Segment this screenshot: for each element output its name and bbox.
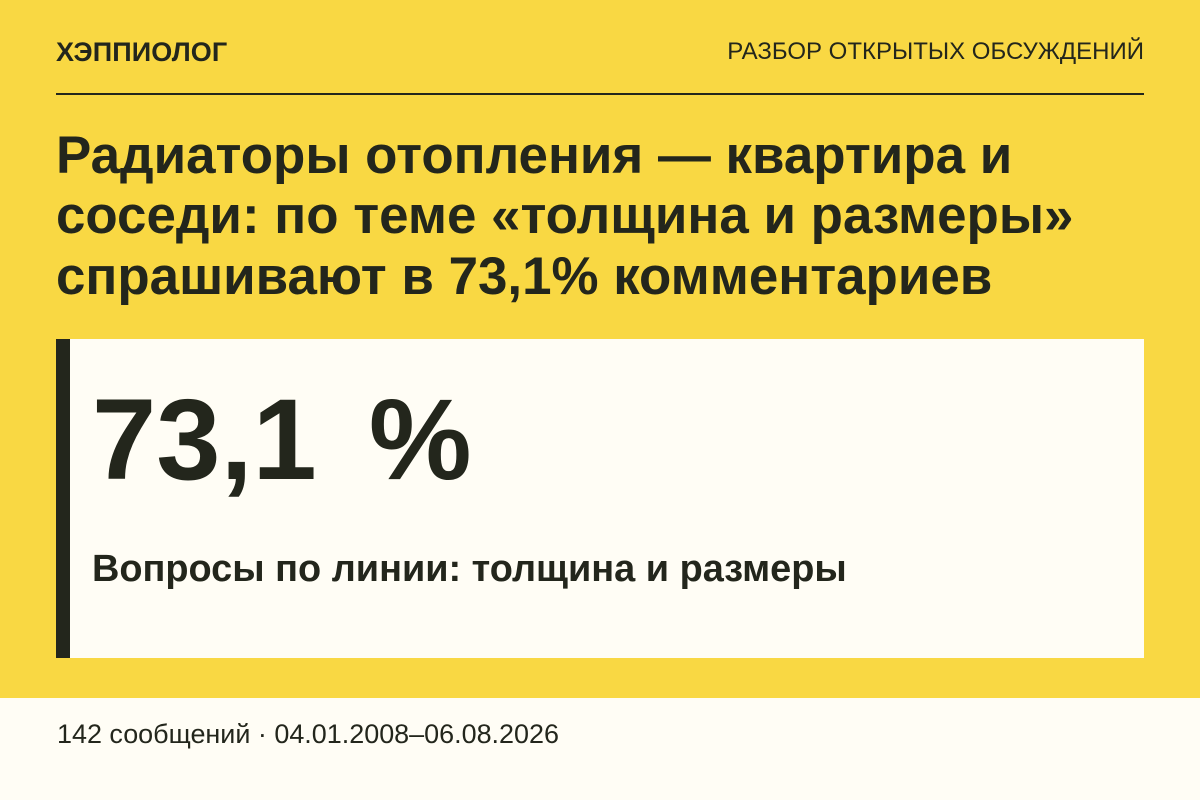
brand name: ХЭППИОЛОГ [56, 36, 227, 66]
title: спрашивают в 73,1% комментариев [56, 246, 992, 306]
title: Радиаторы отопления — квартира и [56, 126, 1012, 184]
big number: 73,1 % [92, 375, 472, 504]
header rule [56, 93, 1144, 95]
panel: key statistic [56, 339, 1144, 658]
footer band [0, 698, 1200, 800]
header caption: РАЗБОР ОТКРЫТЫХ ОБСУЖДЕНИЙ [727, 38, 1144, 65]
panel accent bar [56, 339, 70, 658]
title: соседи: по теме «толщина и размеры» [56, 186, 1073, 245]
statistic label: Вопросы по линии: толщина и размеры [92, 548, 847, 590]
title [56, 126, 1073, 306]
footer text: 142 сообщений · 04.01.2008–06.08.2026 [57, 719, 559, 749]
